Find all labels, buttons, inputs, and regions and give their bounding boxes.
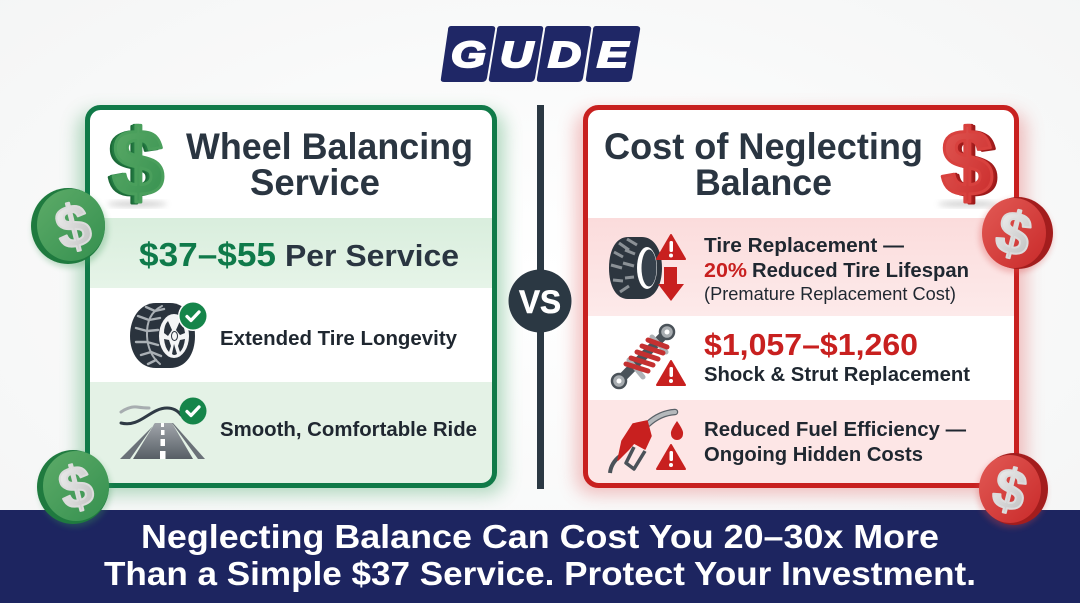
icon: green 3D dollar sign: $ xyxy=(108,111,160,216)
tire replacement row xyxy=(588,218,1014,316)
coin: red bottom right xyxy=(977,453,1048,528)
heading: cost of neglecting balance: Balance xyxy=(695,162,832,203)
panel: wheel balancing service xyxy=(78,108,504,494)
icon: worn tire with warning and down arrow xyxy=(609,235,685,301)
coin: green bottom left xyxy=(37,450,111,527)
banner message xyxy=(104,518,976,592)
price text xyxy=(139,236,459,273)
coin: red bottom right: $ xyxy=(987,455,1033,525)
icon: smooth road with check xyxy=(120,398,206,459)
coin: green top left: $ xyxy=(49,190,97,263)
cost: tire replacement text: Tire Replacement — xyxy=(704,234,904,257)
icon: green 3D dollar sign: $ xyxy=(110,110,162,215)
coin: red top right xyxy=(979,197,1053,273)
price row xyxy=(90,218,492,288)
cost: fuel efficiency text: Reduced Fuel Efficiency — xyxy=(704,418,966,441)
cost: shock and strut text xyxy=(704,327,970,386)
VS badge: VS xyxy=(519,284,561,320)
panel: cost of neglecting balance xyxy=(576,108,1026,494)
heading: cost of neglecting balance: Cost of Neglecting xyxy=(604,126,923,167)
logo: GUDE: D xyxy=(548,34,581,75)
icon: red 3D dollar sign: $ xyxy=(943,110,995,215)
heading: wheel balancing service: Wheel Balancing xyxy=(186,126,473,167)
logo: GUDE: E xyxy=(597,34,629,75)
benefit: tire longevity: Extended Tire Longevity xyxy=(220,327,458,350)
icon: shock absorber with warning xyxy=(612,325,685,388)
logo: GUDE: U xyxy=(500,34,534,75)
cost: tire replacement text: 20% xyxy=(704,259,747,282)
heading: wheel balancing service xyxy=(186,126,473,203)
price text: Per Service xyxy=(285,238,459,273)
ride row xyxy=(90,382,492,483)
coin: green bottom left: $ xyxy=(53,452,100,523)
cost: tire replacement text: (Premature Replacement Cost) xyxy=(704,284,956,304)
cost: shock and strut text: Shock & Strut Replacement xyxy=(704,363,970,386)
coin: red top right: $ xyxy=(990,197,1038,270)
logo: GUDE xyxy=(441,26,640,82)
logo: GUDE: G xyxy=(451,34,486,75)
VS badge xyxy=(508,270,572,332)
price text: $37–$55 xyxy=(139,236,276,273)
fuel row xyxy=(588,400,1014,483)
icon: fuel nozzle with drop and warning xyxy=(610,412,685,473)
icon: tire with check xyxy=(130,301,208,368)
cost: tire replacement text: Reduced Tire Lifespan xyxy=(752,259,969,282)
coin: green top left xyxy=(31,188,108,268)
banner message: Than a Simple $37 Service. Protect Your Investment. xyxy=(104,555,976,592)
icon: green 3D dollar sign: $ xyxy=(112,110,164,215)
cost: tire replacement text xyxy=(704,234,969,304)
icon: red 3D dollar sign: $ xyxy=(941,110,993,215)
bottom banner xyxy=(0,510,1080,603)
cost: fuel efficiency text: Ongoing Hidden Costs xyxy=(704,443,923,466)
cost: fuel efficiency text xyxy=(704,418,966,466)
heading: cost of neglecting balance xyxy=(604,126,923,203)
icon: red 3D dollar sign: $ xyxy=(945,111,997,216)
divider line xyxy=(537,105,544,489)
benefit: smooth ride: Smooth, Comfortable Ride xyxy=(220,418,477,441)
heading: wheel balancing service: Service xyxy=(250,162,380,203)
cost: shock and strut text: $1,057–$1,260 xyxy=(704,327,918,362)
banner message: Neglecting Balance Can Cost You 20–30x More xyxy=(141,518,939,555)
